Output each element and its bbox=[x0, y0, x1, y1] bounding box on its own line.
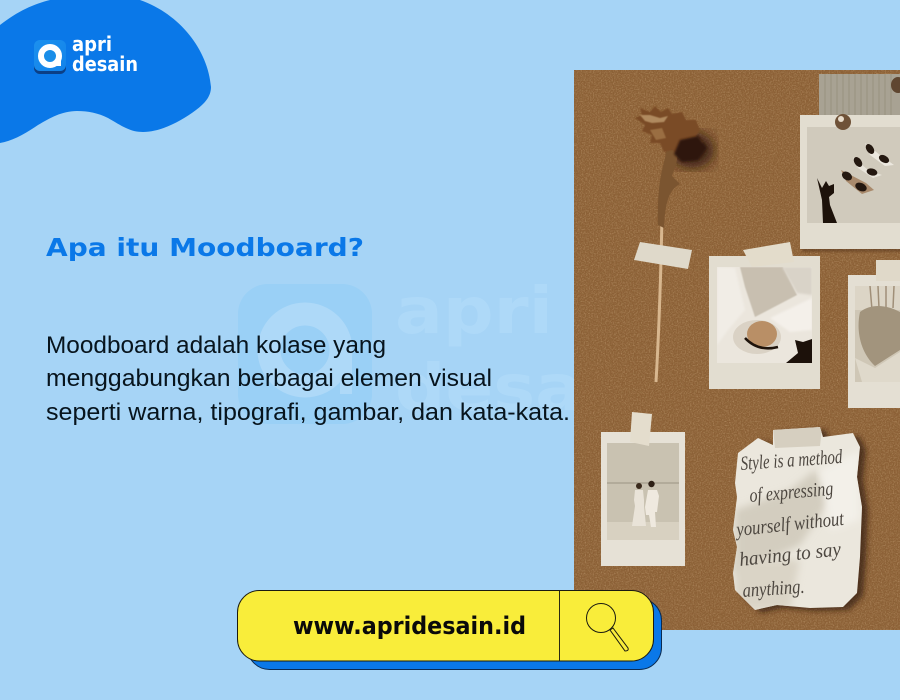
logo blob bbox=[0, 0, 211, 143]
search bar field bbox=[238, 590, 654, 661]
hat bbox=[733, 320, 781, 354]
body text bbox=[46, 332, 570, 426]
polaroid: two people bbox=[601, 432, 685, 566]
polaroid: rattan chair bbox=[848, 275, 900, 408]
watermark logo: apri bbox=[395, 275, 553, 349]
tape on chair polaroid bbox=[876, 260, 900, 281]
search bar bbox=[238, 590, 662, 670]
corkboard photo bbox=[574, 70, 900, 630]
watermark logo: desain bbox=[395, 352, 657, 426]
icon: sunglasses bbox=[840, 142, 894, 194]
figure left bbox=[632, 490, 646, 526]
tape on people polaroid bbox=[630, 412, 652, 446]
url text: www.apridesain.id bbox=[293, 612, 526, 640]
body text: seperti warna, tipografi, gambar, dan kata-kata. bbox=[46, 399, 570, 426]
pillow bbox=[740, 267, 797, 317]
handwriting bbox=[734, 446, 845, 602]
search bar shadow bbox=[248, 598, 662, 670]
watermark logo bbox=[238, 284, 372, 424]
logo wordmark: apri bbox=[72, 32, 112, 56]
handwriting: having to say bbox=[738, 538, 842, 571]
handwriting: of expressing bbox=[749, 478, 834, 507]
polaroid: pillow and hat bbox=[709, 256, 820, 389]
body text: Moodboard adalah kolase yang bbox=[46, 332, 386, 359]
logo wordmark: desain bbox=[72, 52, 138, 76]
handwriting: Style is a method bbox=[740, 446, 844, 475]
cork surface bbox=[574, 70, 900, 630]
dried flower bbox=[635, 106, 714, 382]
icon: logo mark bbox=[34, 40, 66, 74]
logo bbox=[34, 32, 138, 76]
icon: hand shadow bbox=[817, 178, 837, 223]
polaroid: sunglasses bbox=[800, 115, 900, 252]
tape on stem bbox=[634, 242, 692, 269]
logo wordmark bbox=[72, 32, 138, 76]
handwriting: yourself without bbox=[734, 508, 845, 541]
body text: menggabungkan berbagai elemen visual bbox=[46, 365, 492, 392]
figure right bbox=[645, 490, 659, 527]
tape on pillow polaroid bbox=[743, 242, 793, 256]
handwriting: anything. bbox=[742, 576, 805, 602]
icon: magnifier bbox=[586, 604, 628, 651]
title: Apa itu Moodboard? bbox=[46, 233, 364, 262]
torn handwritten note bbox=[733, 427, 868, 613]
fabric swatch bbox=[819, 74, 900, 116]
pins bbox=[835, 77, 900, 130]
